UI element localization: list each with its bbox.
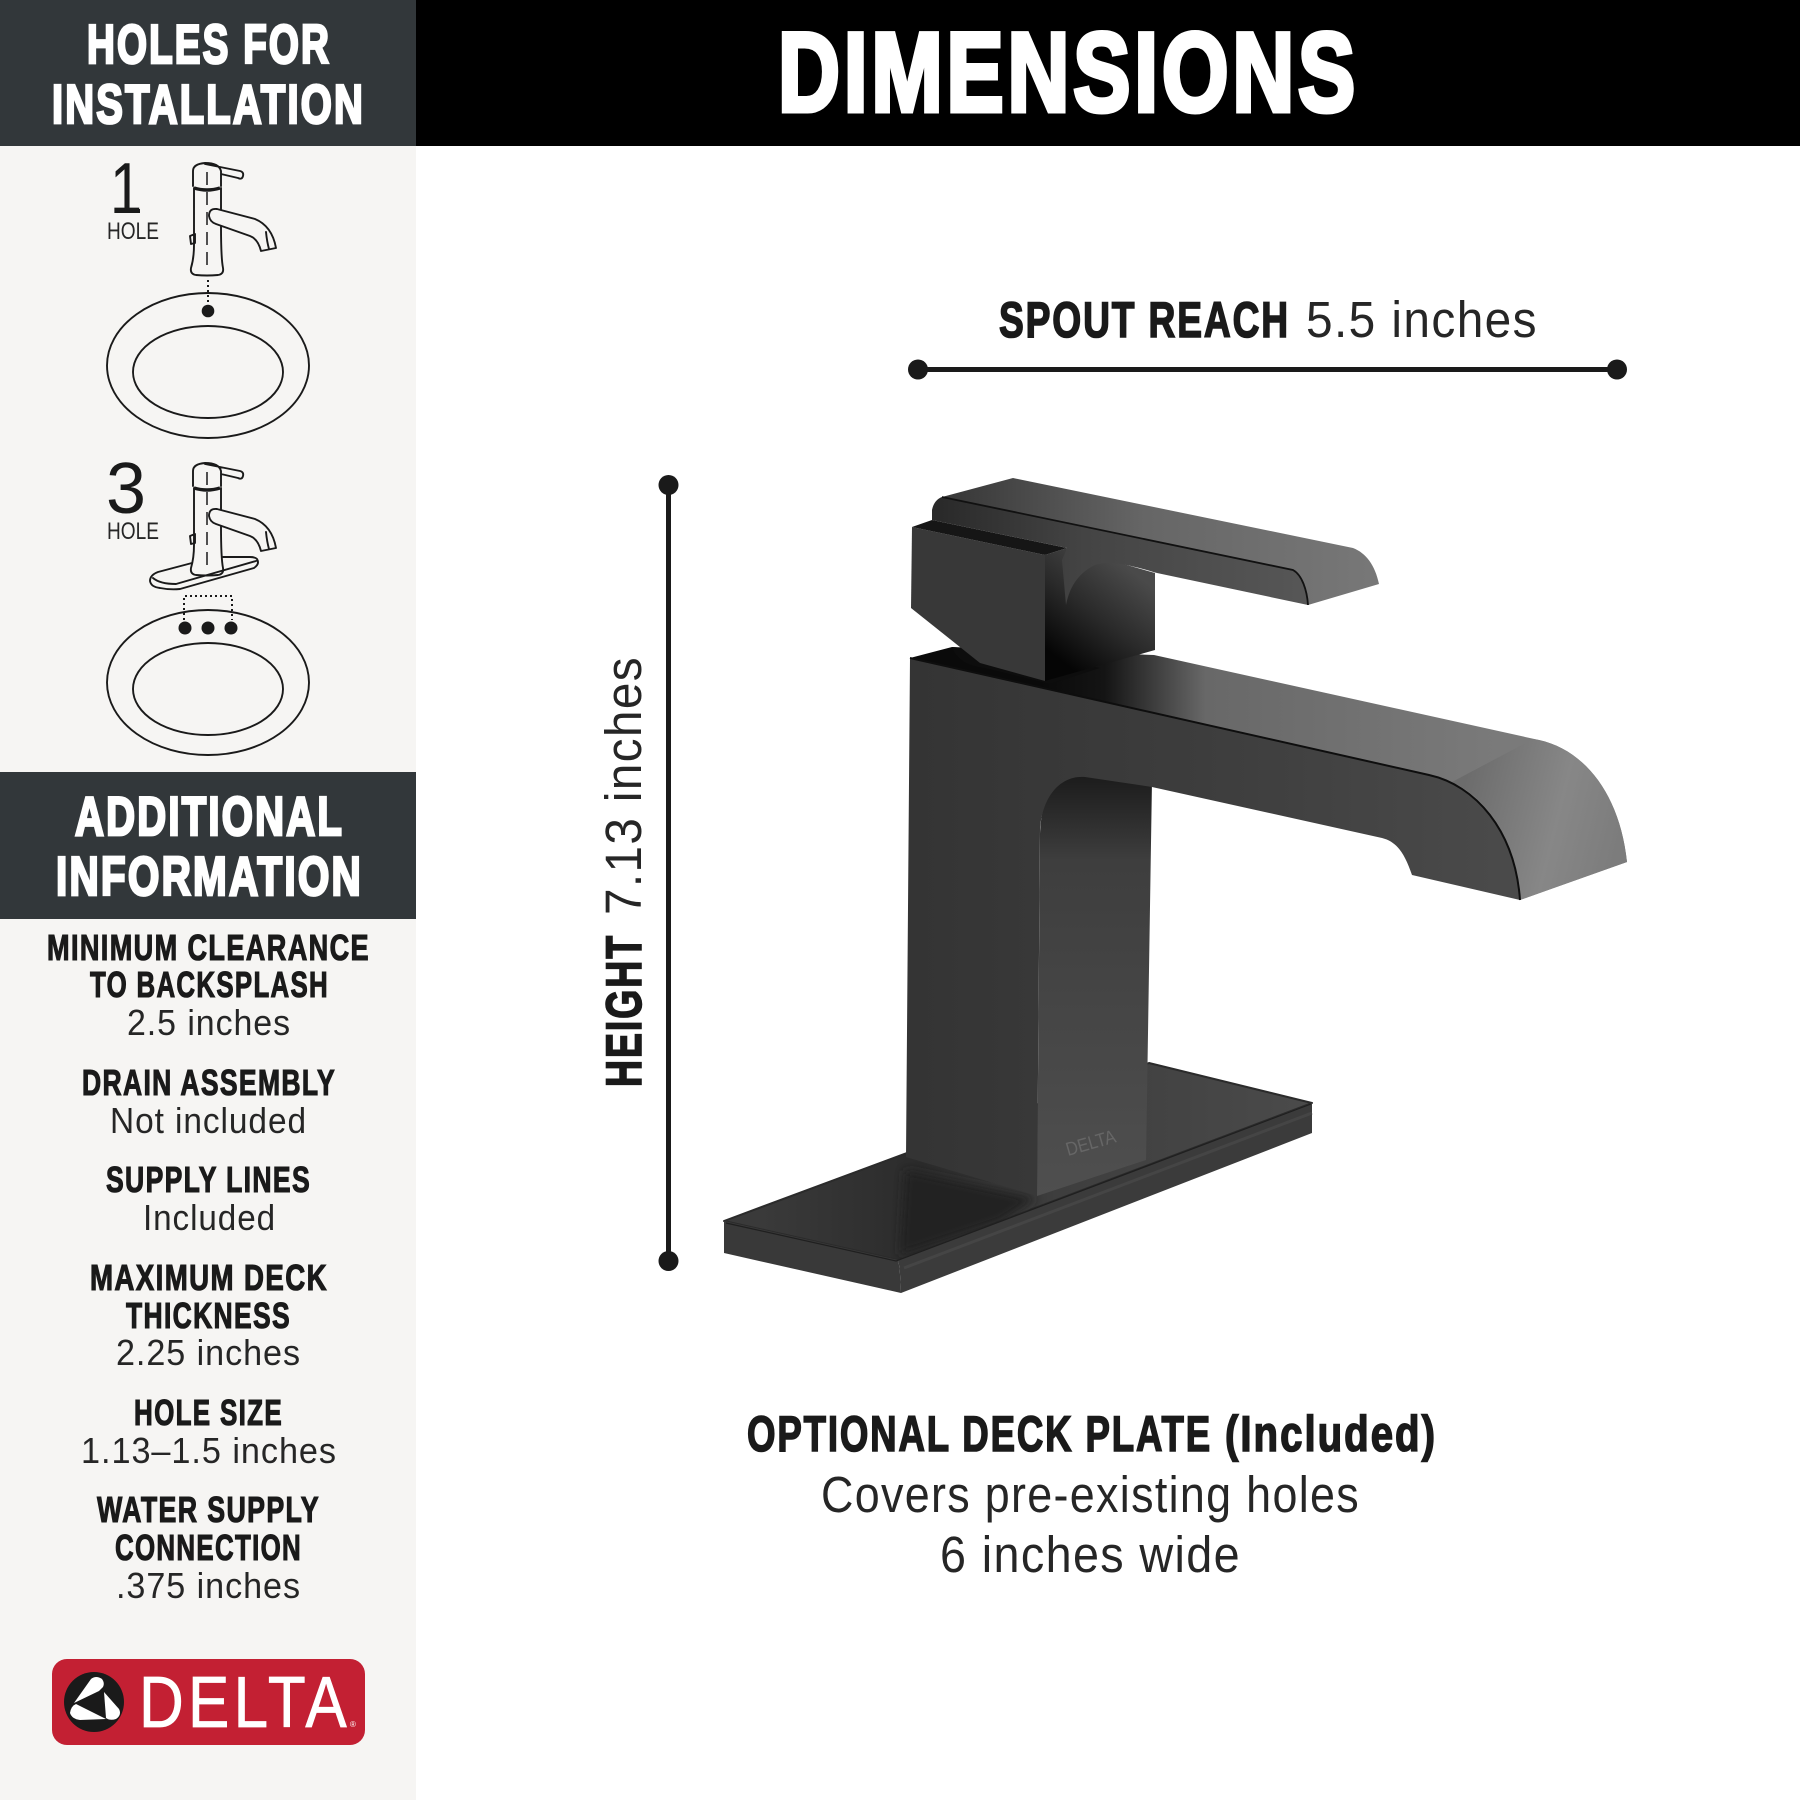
spec: minimum clearance: MINIMUM CLEARANCE (47, 927, 370, 968)
header: holes for installation: HOLES FOR (87, 13, 331, 75)
spec: maximum deck thickness (90, 1257, 328, 1373)
callout: optional deck plate: OPTIONAL DECK PLATE (747, 1406, 1212, 1462)
lever side face (932, 497, 1308, 605)
header: dimensions (416, 0, 1800, 146)
dimension: spout reach (908, 291, 1627, 380)
spec: supply lines (106, 1159, 311, 1238)
header: holes for installation (0, 0, 416, 146)
spec: water supply connection: CONNECTION (115, 1527, 302, 1568)
logo: delta (52, 1659, 365, 1745)
deck plate (724, 1063, 1312, 1293)
callout: optional deck plate: 6 inches wide (940, 1526, 1241, 1583)
left sidebar panel (0, 0, 416, 1800)
spout top edge line (910, 658, 1520, 900)
lever top face (942, 478, 1379, 605)
spec: minimum clearance: 2.5 inches (127, 1002, 291, 1043)
header: dimensions: DIMENSIONS (778, 10, 1359, 135)
dimension: height (595, 475, 678, 1271)
icon: 3 hole diagram: HOLE (107, 518, 159, 545)
header: holes for installation: INSTALLATION (52, 73, 365, 135)
handle front block (911, 527, 1045, 681)
lever edge line (942, 497, 1308, 605)
spec: supply lines: SUPPLY LINES (106, 1159, 311, 1200)
header: additional information: ADDITIONAL (75, 785, 344, 847)
spec: maximum deck thickness: THICKNESS (126, 1295, 291, 1336)
spec: minimum clearance: TO BACKSPLASH (90, 964, 329, 1005)
spout top face (910, 647, 1627, 900)
spec: supply lines: Included (143, 1197, 276, 1238)
main front face (906, 658, 1520, 1196)
icon: 1 hole diagram: HOLE (107, 218, 159, 245)
handle collar (952, 647, 1100, 684)
icon: 3 hole diagram (106, 449, 309, 755)
spec: drain assembly (82, 1062, 336, 1141)
dimension: spout reach: SPOUT REACH (999, 292, 1290, 348)
icon: 1 hole diagram (107, 149, 309, 438)
logo: delta: ® (350, 1720, 356, 1729)
spec: water supply connection: .375 inches (116, 1565, 301, 1606)
header: additional information (0, 772, 416, 919)
header: additional information: INFORMATION (56, 845, 363, 907)
callout: optional deck plate (747, 1406, 1437, 1583)
spec: hole size: 1.13–1.5 inches (81, 1430, 337, 1471)
handle side block (1045, 548, 1155, 681)
spec: maximum deck thickness: 2.25 inches (116, 1332, 301, 1373)
callout: optional deck plate: (Included) (1225, 1406, 1437, 1462)
dimension: height: HEIGHT (596, 934, 652, 1087)
logo: delta: DELTA (139, 1663, 351, 1743)
dimension: spout reach: 5.5 inches (1306, 291, 1538, 348)
spec: water supply connection (97, 1489, 320, 1606)
spec: hole size: HOLE SIZE (134, 1392, 283, 1433)
spec: drain assembly: DRAIN ASSEMBLY (82, 1062, 336, 1103)
spec: minimum clearance (47, 927, 370, 1043)
icon: 3 hole diagram: 3 (106, 449, 146, 529)
spec: maximum deck thickness: MAXIMUM DECK (90, 1257, 328, 1298)
delta engraving: DELTA (1064, 1126, 1119, 1161)
spec: water supply connection: WATER SUPPLY (97, 1489, 320, 1530)
spec: hole size (81, 1392, 337, 1471)
spec: drain assembly: Not included (110, 1100, 307, 1141)
dimension: height: 7.13 inches (595, 656, 652, 915)
inner post face (1037, 765, 1152, 1196)
icon: 1 hole diagram: 1 (110, 149, 142, 229)
callout: optional deck plate: Covers pre-existing holes (821, 1466, 1360, 1523)
handle block top strip (912, 520, 1067, 555)
faucet product image (724, 478, 1627, 1293)
spout rounded end (1452, 739, 1627, 900)
